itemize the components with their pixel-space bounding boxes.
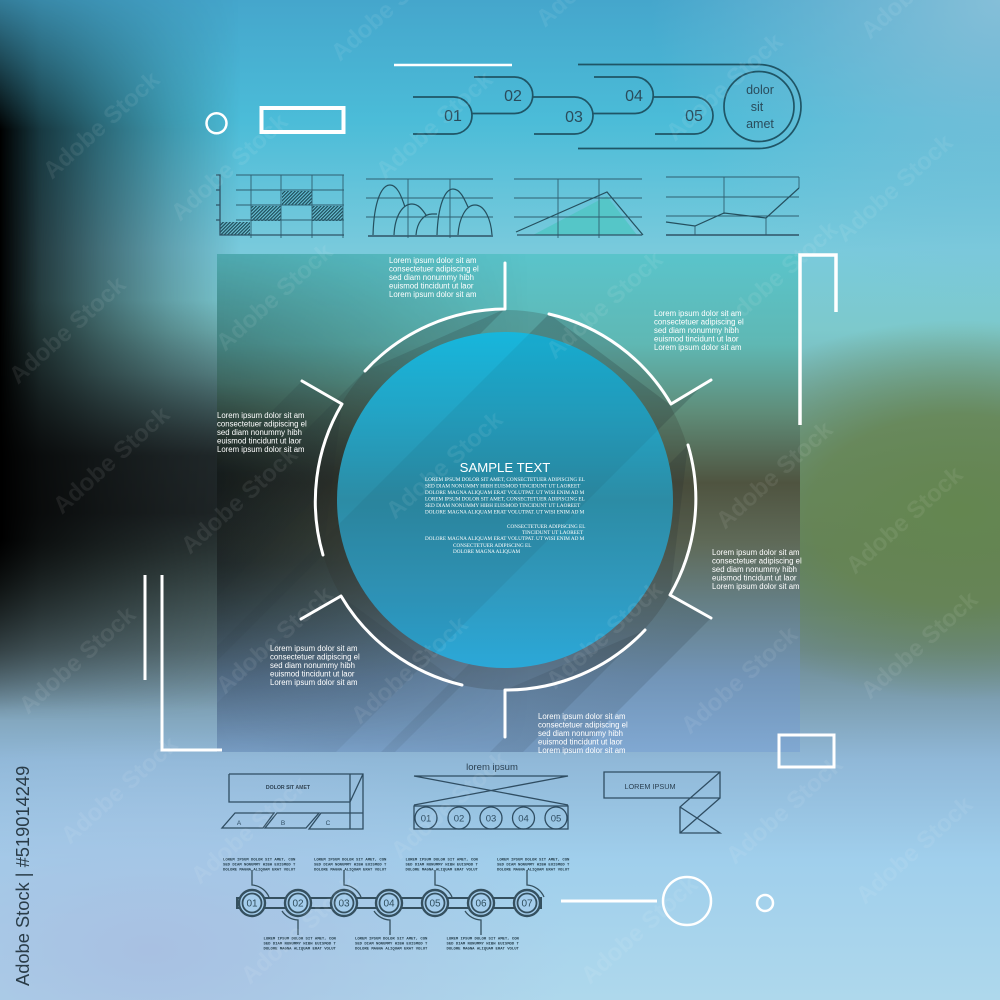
stock watermarks: Adobe Stock bbox=[831, 129, 959, 247]
numbered timeline: SED DIAM NONUMMY HIBH EUISMOD T bbox=[223, 864, 296, 868]
callout text: top: Lorem ipsum dolor sit am bbox=[389, 256, 477, 265]
callout text: bottom: Lorem ipsum dolor sit am bbox=[538, 746, 626, 755]
numbered process chain: 05 bbox=[685, 108, 703, 125]
stock watermarks: Adobe Stock bbox=[716, 216, 844, 334]
banner: lorem ipsum numbered row bbox=[414, 762, 568, 829]
callout text: upper right bbox=[654, 309, 744, 352]
numbered timeline: LOREM IPSUM DOLOR SIT AMET, CON bbox=[355, 938, 428, 942]
stock watermarks: Adobe Stock bbox=[856, 586, 984, 704]
central text block: LOREM IPSUM DOLOR SIT AMET, CONSECTETUER ADIPISCING EL bbox=[425, 496, 585, 502]
central text block bbox=[425, 460, 585, 555]
numbered timeline: LOREM IPSUM DOLOR SIT AMET, CON bbox=[314, 858, 387, 862]
central text block: TINCIDUNT UT LAOREET bbox=[522, 530, 584, 536]
callout text: left: Lorem ipsum dolor sit am bbox=[217, 411, 305, 420]
banner: lorem ipsum numbered row: 03 bbox=[486, 814, 496, 824]
numbered timeline: DOLORE MAGNA ALIQUAM ERAT VOLUT bbox=[497, 868, 570, 872]
numbered timeline: 02 bbox=[292, 898, 304, 910]
numbered timeline: DOLORE MAGNA ALIQUAM ERAT VOLUT bbox=[446, 948, 520, 952]
banner: lorem ipsum numbered row: 05 bbox=[551, 814, 561, 824]
chart: triangular area bbox=[514, 179, 643, 238]
stock watermarks: Adobe Stock bbox=[541, 576, 669, 694]
callout text: bottom: consectetuer adipiscing el bbox=[538, 720, 628, 730]
stock watermarks: Adobe Stock bbox=[14, 601, 142, 719]
numbered process chain: dolor bbox=[746, 83, 774, 97]
numbered timeline: DOLORE MAGNA ALIQUAM ERAT VOLUT bbox=[223, 868, 296, 872]
banner: lorem ipsum folded ribbon: LOREM IPSUM bbox=[624, 782, 676, 791]
numbered process chain: 04 bbox=[625, 88, 643, 105]
callout text: lower left: Lorem ipsum dolor sit am bbox=[270, 644, 358, 653]
numbered timeline: LOREM IPSUM DOLOR SIT AMET, CON bbox=[264, 938, 337, 942]
callout text: lower left: Lorem ipsum dolor sit am bbox=[270, 678, 358, 687]
callout text: right: Lorem ipsum dolor sit am bbox=[712, 582, 800, 591]
numbered process chain bbox=[413, 64, 801, 148]
central text block: CONSECTETUER ADIPISCING EL bbox=[507, 524, 585, 530]
numbered process chain: 03 bbox=[565, 109, 583, 126]
stock watermarks: Adobe Stock bbox=[576, 871, 704, 989]
callout text: upper right: consectetuer adipiscing el bbox=[654, 318, 744, 326]
stock watermarks: Adobe Stock bbox=[381, 406, 509, 524]
callout text: lower left: consectetuer adipiscing el bbox=[270, 652, 360, 662]
callout text: bottom bbox=[538, 712, 628, 755]
numbered timeline: 01 bbox=[246, 898, 258, 910]
callout text: top: sed diam nonummy hibh bbox=[389, 273, 474, 282]
stock watermarks: Adobe Stock bbox=[38, 66, 166, 184]
stock watermarks: Adobe Stock bbox=[851, 791, 979, 909]
numbered timeline: SED DIAM NONUMMY HIBH EUISMOD T bbox=[406, 864, 479, 868]
chart: overlapping arches bbox=[366, 179, 493, 238]
numbered timeline: LOREM IPSUM DOLOR SIT AMET, CON bbox=[497, 858, 570, 862]
callout text: right: consectetuer adipiscing el bbox=[712, 556, 802, 566]
stock watermarks: Adobe Stock bbox=[186, 771, 314, 889]
banner: dolor sit amet: C bbox=[326, 820, 331, 827]
callout text: right: Lorem ipsum dolor sit am bbox=[712, 548, 800, 557]
callout text: top bbox=[389, 256, 479, 299]
callout text: upper right: Lorem ipsum dolor sit am bbox=[654, 343, 742, 352]
stock watermarks: Adobe Stock bbox=[386, 746, 514, 864]
numbered timeline: DOLORE MAGNA ALIQUAM ERAT VOLUT bbox=[355, 948, 428, 952]
banner: lorem ipsum numbered row: lorem ipsum bbox=[466, 762, 518, 773]
numbered timeline: SED DIAM NONUMMY HIBH EUISMOD T bbox=[355, 942, 428, 946]
callout text: upper right: Lorem ipsum dolor sit am bbox=[654, 309, 742, 318]
callout text: lower left: euismod tincidunt ut laor bbox=[270, 670, 355, 678]
numbered timeline: SED DIAM NONUMMY HIBH EUISMOD T bbox=[446, 942, 520, 946]
stock watermarks: Adobe Stock bbox=[676, 621, 804, 739]
stock watermarks: Adobe Stock bbox=[346, 611, 474, 729]
banner: lorem ipsum numbered row: 01 bbox=[421, 814, 431, 824]
stock watermarks: Adobe Stock bbox=[166, 108, 294, 226]
stock watermarks: Adobe Stock bbox=[721, 751, 849, 869]
callout text: right: euismod tincidunt ut laor bbox=[712, 574, 797, 582]
central blue circle bbox=[337, 332, 673, 668]
callout text: right: sed diam nonummy hibh bbox=[712, 565, 797, 574]
inner translucent square bbox=[217, 254, 800, 752]
stock watermarks: Adobe Stock bbox=[48, 401, 176, 519]
banner: dolor sit amet: DOLOR SIT AMET bbox=[266, 785, 311, 791]
numbered timeline: DOLORE MAGNA ALIQUAM ERAT VOLUT bbox=[406, 868, 479, 872]
stock watermarks: Adobe Stock bbox=[211, 581, 339, 699]
callout text: upper right: sed diam nonummy hibh bbox=[654, 326, 739, 335]
callout text: top: Lorem ipsum dolor sit am bbox=[389, 290, 477, 299]
callout text: top: euismod tincidunt ut laor bbox=[389, 282, 474, 290]
numbered timeline: 07 bbox=[521, 898, 533, 910]
numbered process chain: sit bbox=[751, 100, 764, 114]
banner: lorem ipsum numbered row: 04 bbox=[518, 814, 529, 824]
numbered timeline: LOREM IPSUM DOLOR SIT AMET, CON bbox=[406, 858, 479, 862]
callout text: right bbox=[712, 548, 802, 591]
stock watermarks: Adobe Stock bbox=[176, 441, 304, 559]
central text block: SED DIAM NONUMMY HIBH EUISMOD TINCIDUNT UT LAOREET bbox=[425, 503, 581, 509]
callout text: lower left bbox=[270, 644, 360, 687]
callout text: left: sed diam nonummy hibh bbox=[217, 428, 302, 437]
numbered timeline: LOREM IPSUM DOLOR SIT AMET, CON bbox=[446, 938, 520, 942]
stock watermarks: Adobe Stock bbox=[371, 66, 499, 184]
numbered timeline: 04 bbox=[383, 898, 395, 910]
numbered timeline: LOREM IPSUM DOLOR SIT AMET, CON bbox=[223, 858, 296, 862]
banner: dolor sit amet bbox=[222, 774, 363, 829]
stock watermarks: Adobe Stock bbox=[236, 871, 364, 989]
central text block: SED DIAM NONUMMY HIBH EUISMOD TINCIDUNT UT LAOREET bbox=[425, 484, 581, 490]
numbered timeline bbox=[223, 858, 570, 952]
banner: lorem ipsum folded ribbon bbox=[604, 772, 720, 833]
numbered timeline: 05 bbox=[429, 898, 441, 910]
callout text: left: consectetuer adipiscing el bbox=[217, 420, 307, 428]
numbered timeline: DOLORE MAGNA ALIQUAM ERAT VOLUT bbox=[314, 868, 387, 872]
numbered timeline: DOLORE MAGNA ALIQUAM ERAT VOLUT bbox=[264, 948, 337, 952]
callout text: bottom: Lorem ipsum dolor sit am bbox=[538, 712, 626, 721]
central text block: DOLORE MAGNA ALIQUAM ERAT VOLUTPAT. UT WISI ENIM AD M bbox=[425, 490, 585, 496]
banner: dolor sit amet: A bbox=[237, 820, 242, 827]
banner: lorem ipsum numbered row: 02 bbox=[454, 814, 464, 824]
central text block: DOLORE MAGNA ALIQUAM ERAT VOLUTPAT. UT WISI ENIM AD M bbox=[425, 536, 585, 542]
numbered timeline: 03 bbox=[338, 898, 350, 910]
stock watermarks: Adobe Stock bbox=[711, 416, 839, 534]
vertical stock id: Adobe Stock | #519014249 bbox=[12, 766, 33, 986]
callout text: left bbox=[217, 411, 307, 454]
numbered timeline: 06 bbox=[475, 898, 487, 910]
callout text: upper right: euismod tincidunt ut laor bbox=[654, 334, 739, 344]
numbered process chain: amet bbox=[746, 117, 774, 131]
stock watermarks: Adobe Stock bbox=[661, 28, 789, 146]
long shadows of the ring bbox=[217, 310, 710, 752]
chart: hatched step grid bbox=[216, 175, 344, 238]
callout text: bottom: sed diam nonummy hibh bbox=[538, 729, 623, 738]
central text block: SAMPLE TEXT bbox=[460, 460, 550, 475]
white decorative frames and shapes bbox=[145, 65, 836, 925]
chart: line chart bbox=[666, 177, 799, 235]
numbered timeline: SED DIAM NONUMMY HIBH EUISMOD T bbox=[314, 864, 387, 868]
banner: dolor sit amet: B bbox=[281, 820, 285, 827]
central text block: DOLORE MAGNA ALIQUAM bbox=[453, 549, 521, 555]
callout text: top: consectetuer adipiscing el bbox=[389, 264, 479, 274]
callout text: left: euismod tincidunt ut laor bbox=[217, 436, 302, 446]
central text block: LOREM IPSUM DOLOR SIT AMET, CONSECTETUER ADIPISCING EL bbox=[425, 477, 585, 483]
stock watermarks: Adobe Stock bbox=[4, 271, 132, 389]
central text block: DOLORE MAGNA ALIQUAM ERAT VOLUTPAT. UT WISI ENIM AD M bbox=[425, 510, 585, 516]
callout text: lower left: sed diam nonummy hibh bbox=[270, 661, 355, 670]
central text block: CONSECTETUER ADIPISCING EL bbox=[453, 543, 531, 549]
stock watermarks: Adobe Stock bbox=[211, 238, 339, 356]
numbered process chain: 02 bbox=[504, 88, 522, 105]
callout text: bottom: euismod tincidunt ut laor bbox=[538, 738, 623, 746]
callout text: left: Lorem ipsum dolor sit am bbox=[217, 445, 305, 454]
band between ring and circle bbox=[315, 310, 695, 690]
numbered timeline: SED DIAM NONUMMY HIBH EUISMOD T bbox=[264, 942, 337, 946]
stock watermarks: Adobe Stock bbox=[841, 461, 969, 579]
numbered timeline: SED DIAM NONUMMY HIBH EUISMOD T bbox=[497, 864, 570, 868]
numbered process chain: 01 bbox=[444, 108, 462, 125]
stock watermarks: Adobe Stock bbox=[56, 731, 184, 849]
segmented white ring bbox=[301, 263, 711, 737]
stock watermarks: Adobe Stock bbox=[541, 246, 669, 364]
